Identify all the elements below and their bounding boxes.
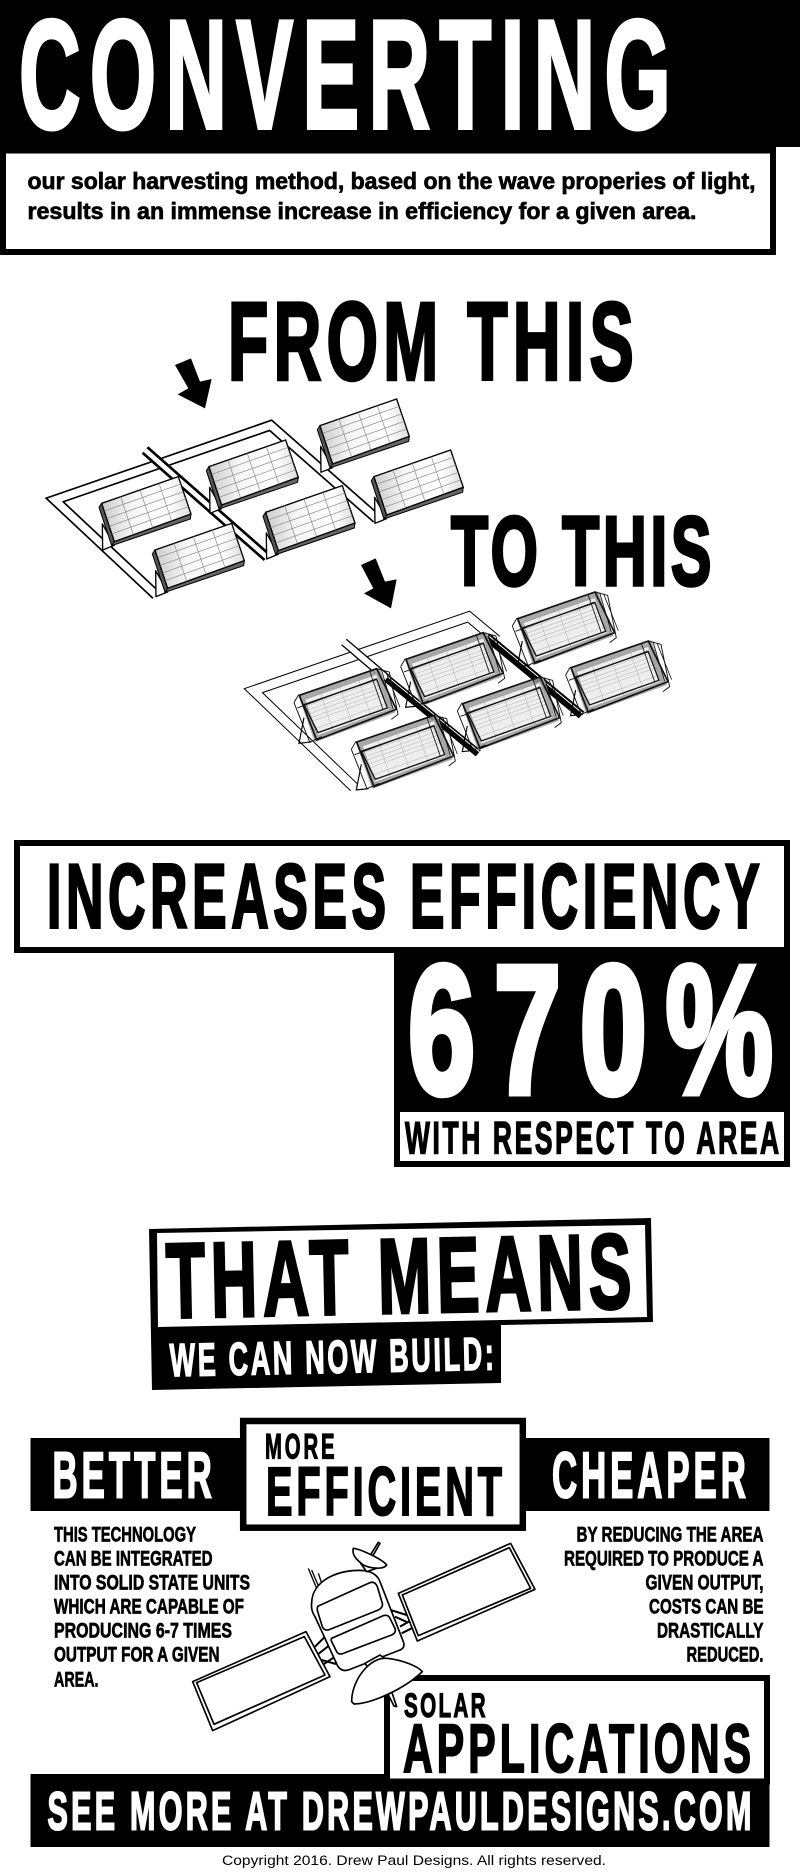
header band [0, 0, 800, 161]
illustration: solar panels [55, 399, 463, 597]
more: MORE [265, 1428, 335, 1467]
intro text: our solar harvesting method, based on the wave properies of light, [28, 168, 756, 194]
subheading: WE CAN NOW BUILD: [169, 1329, 494, 1387]
arrow: to this [361, 558, 397, 608]
intro text [28, 168, 756, 224]
satellite left panel [193, 1632, 330, 1731]
satellite antennas [308, 1568, 323, 1588]
left paragraph: AREA. [54, 1668, 98, 1692]
satellite right panel [398, 1543, 535, 1641]
left paragraph: CAN BE INTEGRATED [54, 1547, 212, 1571]
band: better more efficient cheaper [30, 1421, 770, 1530]
stat caption: WITH RESPECT TO AREA [405, 1112, 779, 1163]
satellite top dish [361, 1563, 377, 1572]
illustration: satellite [193, 1542, 535, 1731]
illustration: converted solar panels [253, 592, 672, 790]
arrow: from this [175, 358, 212, 408]
increases efficiency banner [17, 843, 787, 950]
that means panel [149, 1212, 653, 1390]
copyright: Copyright 2016. Drew Paul Designs. All rights reserved. [222, 1853, 606, 1868]
solar: SOLAR [404, 1686, 486, 1725]
efficient: EFFICIENT [266, 1453, 502, 1530]
satellite body [311, 1570, 404, 1670]
satellite struts [315, 1609, 412, 1664]
right paragraph [564, 1522, 764, 1666]
applications: APPLICATIONS [403, 1710, 751, 1787]
footer link text: SEE MORE AT DREWPAULDESIGNS.COM [48, 1783, 751, 1842]
heading: from this: FROM THIS [228, 281, 634, 404]
intro text: results in an immense increase in efficiency for a given area. [28, 198, 696, 224]
banner text: INCREASES EFFICIENCY [47, 845, 759, 947]
stat caption box [400, 1112, 784, 1161]
left paragraph: WHICH ARE CAPABLE OF [54, 1595, 244, 1619]
right paragraph: REDUCED. [686, 1642, 764, 1666]
cheaper: CHEAPER [552, 1439, 746, 1511]
intro panel [0, 147, 776, 252]
left paragraph: OUTPUT FOR A GIVEN [54, 1642, 220, 1666]
left paragraph: INTO SOLID STATE UNITS [54, 1571, 250, 1595]
more efficient box [243, 1421, 523, 1528]
stat number: 670% [408, 928, 773, 1132]
satellite bottom dish [365, 1655, 387, 1670]
that means heading: THAT MEANS [165, 1212, 632, 1341]
footer band [30, 1774, 770, 1847]
heading: to this: TO THIS [451, 497, 711, 607]
left paragraph: PRODUCING 6-7 TIMES [54, 1619, 232, 1643]
stat panel: 670% [394, 928, 790, 1167]
left paragraph: THIS TECHNOLOGY [54, 1522, 196, 1546]
better: BETTER [52, 1439, 212, 1511]
left paragraph [54, 1522, 250, 1692]
solar applications box [387, 1678, 767, 1787]
